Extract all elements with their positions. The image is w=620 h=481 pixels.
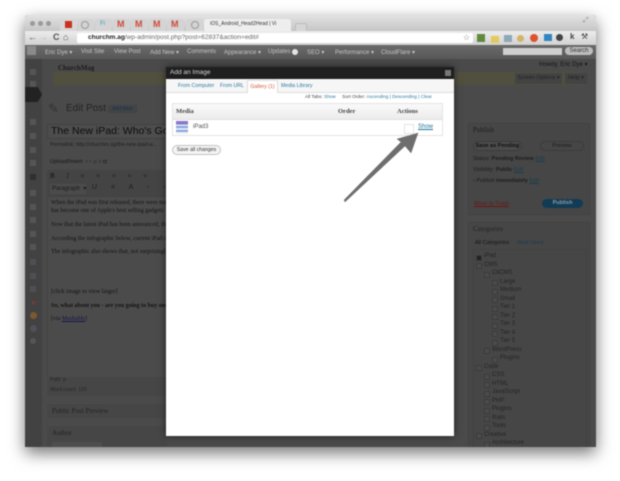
category checklist: WordPress: [492, 347, 522, 353]
admin bar menu: Eric Dye ▾: [45, 50, 72, 56]
table row: iPad3: [175, 120, 434, 134]
publish panel: Save as Pending: [476, 143, 519, 149]
table row: iPad3: Show: [418, 124, 433, 130]
category checklist: Code: [484, 364, 498, 370]
modal tabs: [166, 79, 454, 93]
category checklist: Tier 4: [500, 330, 515, 336]
category checklist: Tier 3: [500, 321, 515, 327]
editor content: [click image to view larger]: [51, 289, 118, 295]
admin bar menu: Add New ▾: [150, 50, 179, 56]
publish panel: Visibility: Public Edit: [473, 167, 523, 173]
categories panel: Most Used: [517, 240, 543, 246]
editor toolbar: B I ≡ ≡ ≡ ≡ ≡: [50, 172, 152, 180]
publish panel: Status: Pending Review Edit: [473, 156, 545, 162]
browser toolbar: [25, 31, 596, 45]
editor status: Path: p: [50, 377, 66, 383]
editor status: [47, 377, 167, 396]
category checklist: Small: [500, 296, 515, 302]
table header: Media: [176, 108, 194, 115]
editor content: [via Mashable]: [51, 316, 87, 322]
category checklist: Rails: [492, 415, 505, 421]
admin bar menu: Performance ▾: [335, 50, 374, 56]
table row: iPad3: iPad3: [193, 124, 208, 130]
modal tabs: From URL: [220, 83, 244, 89]
admin bar menu: CloudFlare ▾: [381, 50, 415, 56]
editor content: has become one of Apple's best selling gadgets: [51, 208, 164, 214]
category checklist: Medium: [500, 287, 521, 293]
navigation buttons: ⌂: [63, 32, 68, 42]
admin bar menu: SEO ▾: [307, 50, 324, 56]
icon: thumbnail: [176, 121, 188, 134]
editor content: The infographic also shows that, not surprisingly: [51, 249, 168, 255]
pinned tabs: M: [171, 19, 178, 29]
editor content: So, what about you - are you going to buy one?: [51, 303, 169, 309]
active tab: iOS_Android_Head2Head | Vi: [210, 21, 276, 27]
admin search: Search: [569, 48, 588, 54]
screen options: Help ▾: [568, 75, 584, 81]
window buttons: [30, 20, 52, 26]
navigation buttons: →: [39, 32, 48, 42]
publish panel: Publish: [473, 126, 494, 134]
editor status: Word count: 120: [50, 387, 87, 393]
category checklist: Large: [500, 279, 515, 285]
table header: Actions: [397, 108, 418, 115]
navigation buttons: C: [53, 32, 60, 42]
admin bar menu: Updates: [268, 49, 290, 55]
category checklist: CMS: [484, 262, 497, 268]
category checklist: JavaScript: [492, 389, 520, 395]
extension icons: [476, 32, 588, 44]
save all changes button: [172, 145, 221, 155]
category checklist: Tools: [492, 423, 506, 429]
public post preview box: [47, 404, 167, 418]
public post preview box: Public Post Preview: [52, 407, 108, 415]
screen options: Screen Options ▾: [517, 75, 560, 81]
pinned tabs: [60, 19, 202, 31]
dimmed admin sidebar: [24, 70, 42, 343]
address bar: [77, 33, 473, 43]
edit post heading: Edit Post: [66, 103, 106, 114]
category checklist: CliCMS: [492, 270, 512, 276]
categories panel: All Categories: [475, 240, 509, 246]
admin bar menu: View Post: [114, 49, 141, 55]
publish panel: Move to Trash: [474, 201, 509, 207]
navigation buttons: ←: [28, 32, 37, 42]
publish panel: ▫ Publish immediately Edit: [473, 178, 539, 184]
modal tabs: Gallery (1): [250, 84, 275, 90]
editor content: Now that the latest iPad has been announced, the: [51, 222, 168, 228]
publish panel: Publish: [553, 200, 572, 206]
edit post heading: Add New: [112, 106, 133, 112]
table header: [173, 104, 442, 120]
admin bar menu: Visit Site: [81, 49, 104, 55]
site name heading: ChurchMag: [58, 64, 94, 72]
publish panel: Preview: [552, 143, 572, 149]
save all changes button: Save all changes: [177, 147, 216, 153]
browser tab strip: [25, 15, 596, 31]
category checklist: HTML: [492, 381, 508, 387]
publish panel: [468, 123, 590, 215]
sort options: All Tabs: Show Sort Order: Ascending | Descending | Clear: [305, 94, 432, 99]
admin search: [502, 46, 594, 56]
media table: [172, 103, 443, 136]
admin bar menu: Comments: [187, 49, 216, 55]
editor toolbar: U ≡ A ▫ ▫: [92, 184, 172, 191]
active tab: [204, 19, 291, 31]
pinned tabs: M: [117, 19, 124, 29]
address bar: ☆: [463, 33, 470, 42]
modal title bar: Add an Image: [170, 69, 210, 76]
notice strip: [53, 72, 583, 85]
extension icons: ⚒: [581, 32, 588, 41]
category checklist: Tier 5: [500, 338, 515, 344]
pinned tabs: M: [135, 19, 142, 29]
category checklist: Tier 1: [500, 304, 515, 310]
author box: [47, 426, 167, 447]
navigation buttons: [28, 32, 68, 42]
resize icon: ⤢: [583, 17, 589, 24]
WordPress admin bar: [25, 45, 596, 59]
admin bar menu: Appearance ▾: [224, 50, 261, 56]
categories panel: Categories: [473, 225, 503, 233]
category checklist: Plugins: [500, 355, 520, 361]
editor content: [47, 196, 169, 378]
category checklist: iPad: [484, 253, 496, 259]
author box: Author: [52, 429, 72, 437]
modal tabs: From Computer: [178, 83, 214, 89]
pinned tabs: Fi: [100, 21, 105, 27]
category checklist: Tier 2: [500, 313, 515, 319]
table header: Order: [338, 108, 355, 115]
pinned tabs: M: [153, 19, 160, 29]
admin bar menu: [26, 46, 416, 56]
modal title bar: [166, 67, 454, 79]
modal tabs: Media Library: [281, 83, 312, 89]
address bar: churchm.ag/wp-admin/post.php?post=62837&action=edit#: [88, 34, 259, 41]
editor toolbar: Paragraph ▾: [52, 186, 86, 192]
category checklist: [473, 249, 587, 450]
modal: add an image: [166, 67, 454, 436]
category checklist: Architecture: [492, 440, 524, 446]
upload insert row: Upload/Insert ▫ ▫ ♫ ○ ◘: [50, 159, 107, 165]
new tab button: [295, 23, 307, 33]
category checklist: CSS: [492, 372, 504, 378]
screen options: [515, 73, 584, 84]
edit post heading: ✎: [48, 101, 59, 116]
category checklist: Plugins: [492, 406, 512, 412]
permalink: Permalink: http://churchm.ag/the-new-ipad-w...: [50, 142, 157, 148]
edit post heading: [48, 101, 136, 116]
categories panel: [468, 222, 590, 449]
category checklist: PHP: [492, 398, 504, 404]
editor toolbar: [47, 170, 167, 196]
editor content: When the iPad was first released, there were many: [51, 200, 169, 206]
category checklist: Creative: [484, 432, 506, 438]
extension icons: k: [570, 32, 574, 41]
howdy text: Howdy, Eric Dye ▾: [539, 62, 588, 68]
